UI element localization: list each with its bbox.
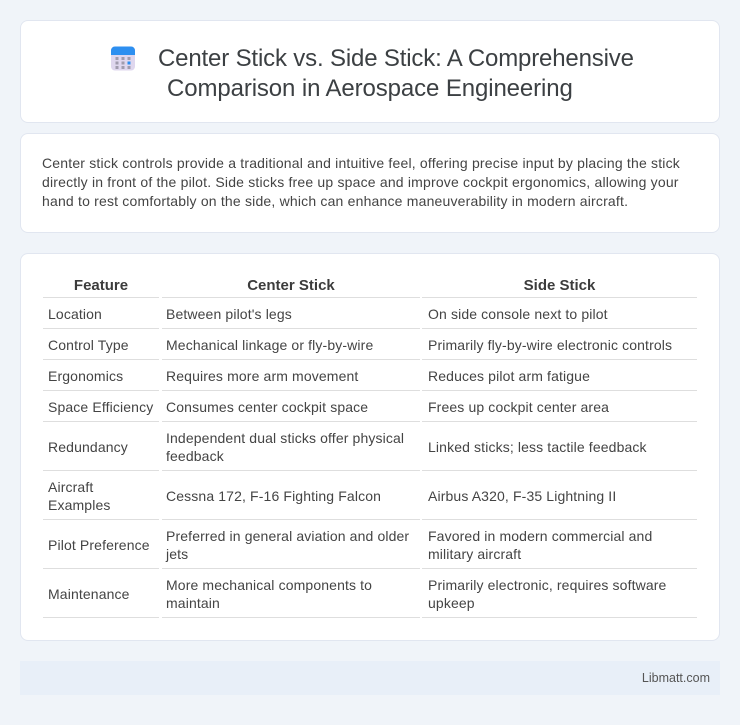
heading: page title: Center Stick vs. Side Stick: A Comprehensive — [158, 45, 634, 72]
row: location: On side console next to pilot — [428, 306, 608, 322]
row: redundancy: Redundancy — [48, 439, 128, 455]
row: ergonomics — [48, 368, 590, 384]
icon: calendar — [111, 46, 135, 70]
row: maintenance: Primarily electronic, requires software — [428, 577, 666, 593]
row: aircraft examples: Aircraft — [48, 479, 93, 495]
row: pilot preference: Pilot Preference — [48, 537, 150, 553]
row: ergonomics: Ergonomics — [48, 368, 123, 384]
row: location: Location — [48, 306, 102, 322]
row: redundancy — [48, 430, 647, 464]
row: pilot preference — [48, 528, 652, 562]
row: pilot preference: Favored in modern commercial and — [428, 528, 652, 544]
row: ergonomics: Requires more arm movement — [166, 368, 358, 384]
row: control type: Control Type — [48, 337, 129, 353]
row: redundancy: Linked sticks; less tactile feedback — [428, 439, 647, 455]
row: space efficiency — [48, 399, 609, 415]
footer — [20, 661, 720, 695]
row: redundancy: feedback — [166, 448, 224, 464]
row: space efficiency: Consumes center cockpit space — [166, 399, 368, 415]
row: control type — [48, 337, 672, 353]
row: maintenance — [48, 577, 666, 611]
table header: Side Stick — [524, 277, 595, 294]
row: pilot preference: jets — [166, 546, 188, 562]
heading: page title — [158, 45, 634, 102]
heading: page title: Comparison in Aerospace Engineering — [167, 75, 573, 102]
table header: Center Stick — [247, 277, 335, 294]
row: control type: Primarily fly-by-wire electronic controls — [428, 337, 672, 353]
row: location: Between pilot's legs — [166, 306, 292, 322]
table header: Feature — [74, 277, 128, 294]
row: maintenance: More mechanical components to — [166, 577, 372, 593]
row: maintenance: upkeep — [428, 595, 475, 611]
text: introduction paragraph: hand to rest comfortably on the side, which can enhance maneuverability in modern aircraft. — [42, 193, 628, 209]
row: ergonomics: Reduces pilot arm fatigue — [428, 368, 590, 384]
row: pilot preference: Preferred in general aviation and older — [166, 528, 409, 544]
row: aircraft examples: Cessna 172, F-16 Fighting Falcon — [166, 488, 381, 504]
panel: title — [20, 20, 720, 123]
panel: comparison table — [20, 253, 720, 641]
text: introduction paragraph: directly in front of the pilot. Side sticks free up space and improve cockpit ergonomics, allowing your — [42, 174, 679, 190]
row: location — [48, 306, 608, 322]
table header — [74, 277, 596, 294]
row: maintenance: Maintenance — [48, 586, 130, 602]
row: pilot preference: military aircraft — [428, 546, 521, 562]
row: aircraft examples — [48, 479, 616, 513]
row: space efficiency: Space Efficiency — [48, 399, 153, 415]
panel: introduction — [20, 133, 720, 233]
text: introduction paragraph: Center stick controls provide a traditional and intuitive feel, offering precise input by placing the stick — [42, 155, 680, 171]
row: maintenance: maintain — [166, 595, 220, 611]
row: redundancy: Independent dual sticks offer physical — [166, 430, 404, 446]
footer text: site name: Libmatt.com — [642, 671, 710, 685]
row: control type: Mechanical linkage or fly-by-wire — [166, 337, 373, 353]
text: introduction paragraph — [42, 155, 680, 209]
row: aircraft examples: Examples — [48, 497, 111, 513]
row: aircraft examples: Airbus A320, F-35 Lightning II — [428, 488, 616, 504]
row: space efficiency: Frees up cockpit center area — [428, 399, 609, 415]
